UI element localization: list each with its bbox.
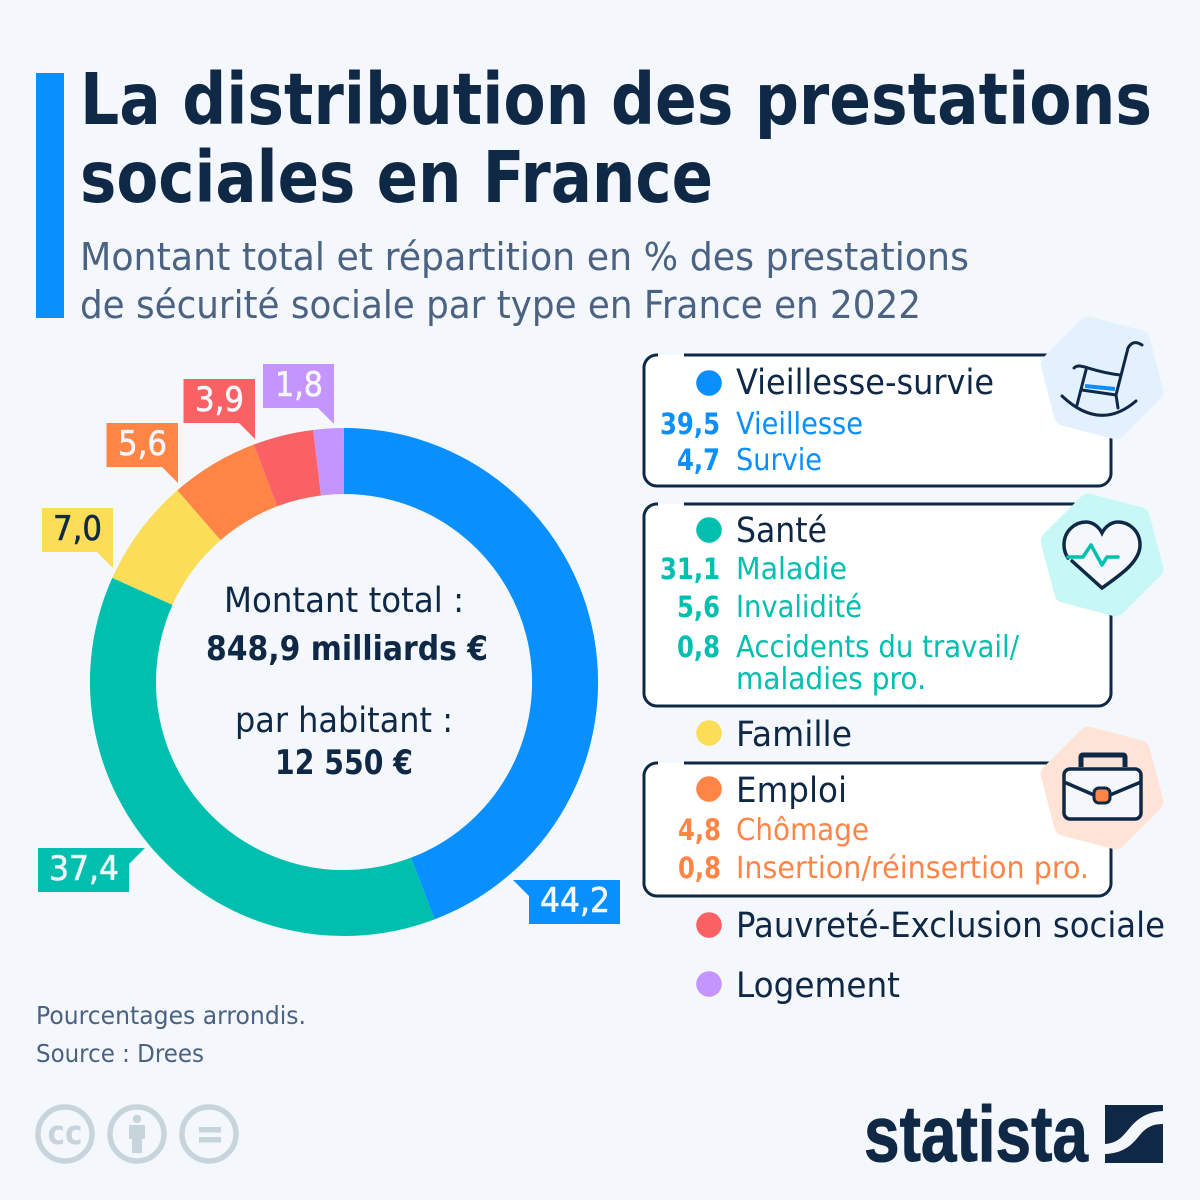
segment: Emploi [199, 475, 266, 515]
row: Insertion: 0,8 [678, 851, 721, 885]
segment: Vieillesse-survie [344, 461, 565, 888]
row: Accidents du travail: maladies pro. [736, 662, 926, 697]
donut chart [123, 461, 565, 903]
legend: Logement: Logement [736, 966, 900, 1006]
icon: creative commons: cc [48, 1113, 82, 1152]
row: Accidents du travail: Accidents du travail/ [736, 630, 1020, 665]
callout: 5,6: 5,6 [118, 424, 167, 464]
callout: 3,9 [184, 379, 255, 439]
legend: Pauvreté-Exclusion sociale: Pauvreté-Exclusion sociale [736, 906, 1165, 946]
legend dot [696, 370, 722, 396]
panel: Vieillesse-survie [644, 355, 1111, 486]
donut centre text: Montant total : [224, 581, 464, 621]
segment: Santé [123, 591, 423, 903]
icon: briefcase [1051, 737, 1153, 839]
legend dot [696, 776, 722, 802]
footnote and source: Pourcentages arrondis. [36, 1001, 306, 1030]
callout: 37,4 [38, 848, 145, 892]
row: Vieillesse: Vieillesse [736, 407, 863, 442]
row: Accidents du travail [677, 630, 1020, 697]
row: Invalidité: 5,6 [677, 590, 720, 624]
icon: no derivatives [182, 1107, 236, 1161]
legend: Famille: Famille [736, 715, 852, 755]
row: Survie [677, 443, 822, 478]
callout: 44,2: 44,2 [540, 881, 610, 921]
row: Accidents du travail: 0,8 [677, 630, 720, 664]
row: Maladie [660, 552, 847, 587]
callout: 5,6 [106, 423, 178, 483]
category name: Santé [736, 511, 827, 551]
row: Invalidité [677, 590, 862, 625]
callout: 44,2 [513, 880, 620, 924]
segment: Famille [142, 515, 199, 591]
row: Chômage [678, 813, 869, 848]
title [80, 58, 1152, 219]
row: Insertion: Insertion/réinsertion pro. [736, 851, 1089, 886]
category name: Emploi [736, 771, 847, 811]
callout: 7,0 [42, 508, 113, 568]
donut centre text [206, 581, 488, 783]
title accent bar [36, 73, 64, 318]
callout: 3,9: 3,9 [195, 380, 244, 420]
title: sociales en France [80, 136, 713, 219]
callout: 1,8 [263, 364, 334, 424]
donut centre text: 12 550 € [275, 743, 413, 783]
icon: heart [1051, 504, 1153, 606]
donut centre text: par habitant : [235, 701, 453, 741]
row: Chômage: 4,8 [678, 813, 721, 847]
legend dot [696, 517, 722, 543]
row: Chômage: Chômage [736, 813, 869, 848]
row: Invalidité: Invalidité [736, 590, 862, 625]
icon: attribution [110, 1107, 164, 1161]
row: Survie: 4,7 [677, 443, 720, 477]
panel: Emploi [644, 763, 1111, 896]
row: Vieillesse: 39,5 [660, 407, 720, 441]
callout: 37,4: 37,4 [49, 849, 119, 889]
icon: rocking chair [1051, 327, 1153, 429]
logo: statista: statista [864, 1089, 1089, 1178]
category name: Vieillesse-survie [736, 363, 994, 403]
footnote and source: Source : Drees [36, 1039, 204, 1068]
footnote and source [36, 1001, 306, 1068]
row: Maladie: 31,1 [660, 552, 720, 586]
panel: Santé [644, 504, 1111, 706]
segment: Pauvreté-Exclusion sociale [266, 463, 317, 475]
row: Survie: Survie [736, 443, 822, 478]
segment: Logement [317, 461, 344, 463]
row: Vieillesse [660, 407, 863, 442]
icon: creative commons [38, 1107, 92, 1161]
subtitle: Montant total et répartition en % des prestations [80, 235, 969, 279]
callout: 1,8: 1,8 [275, 365, 323, 405]
subtitle: de sécurité sociale par type en France en 2022 [80, 283, 921, 327]
callout: 7,0: 7,0 [53, 509, 102, 549]
logo mark [1105, 1105, 1163, 1163]
row: Maladie: Maladie [736, 552, 847, 587]
subtitle [80, 235, 969, 327]
donut centre text: 848,9 milliards € [206, 629, 488, 669]
